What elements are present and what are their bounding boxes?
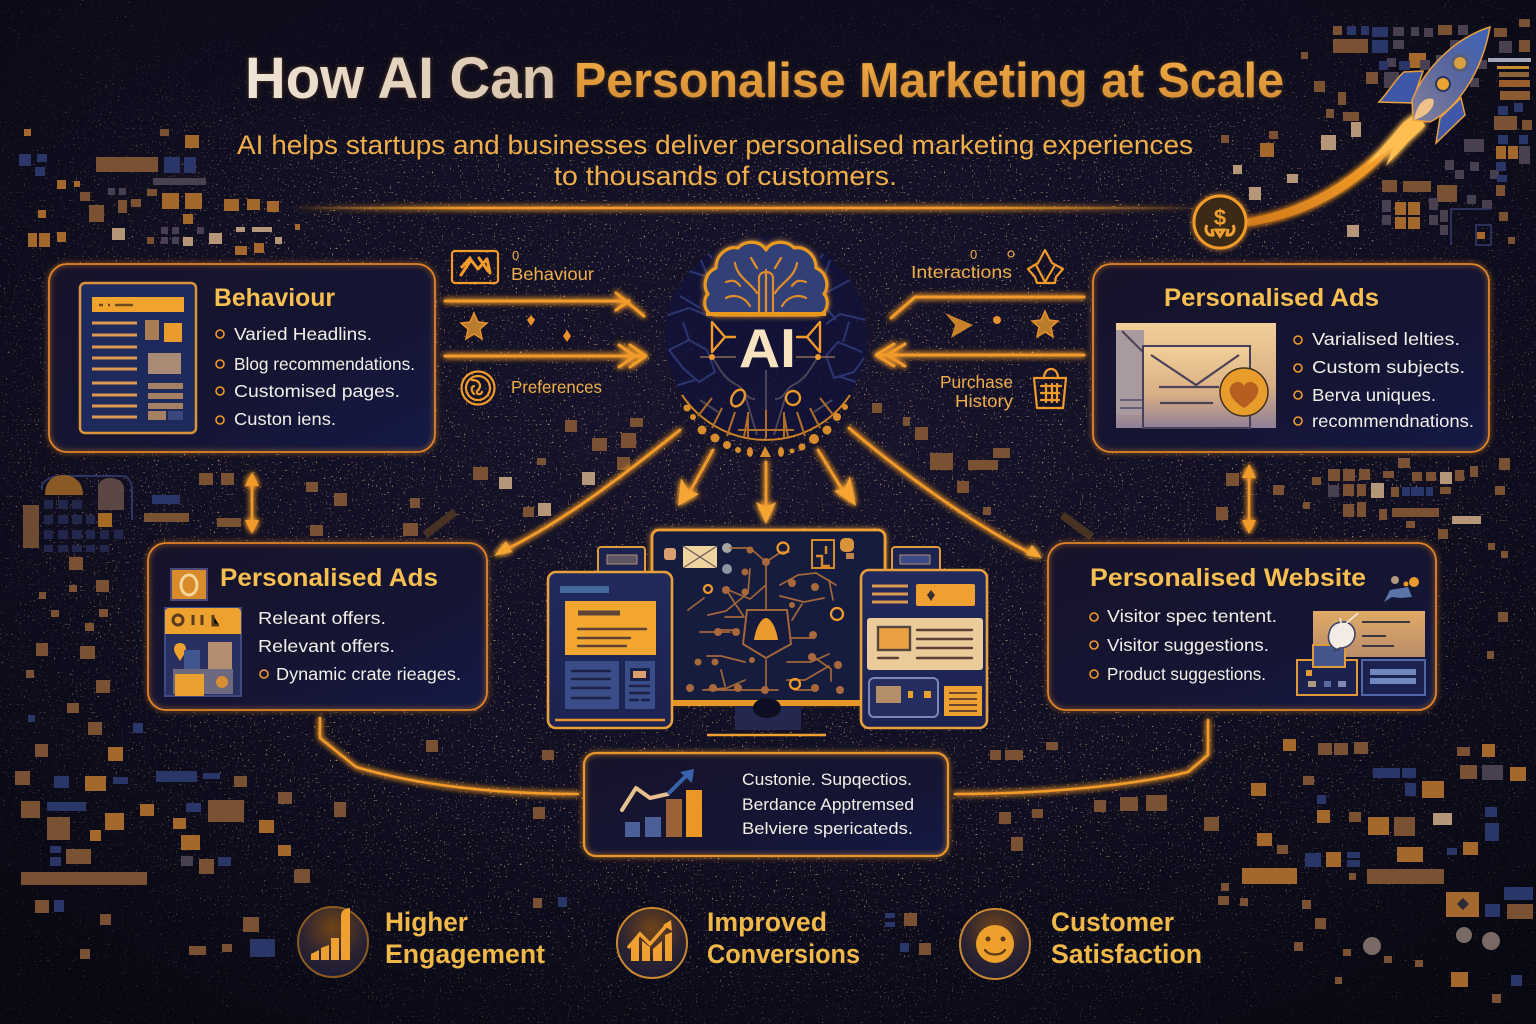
tick ring xyxy=(684,404,848,457)
offer list: Dynamic crate rieages. xyxy=(276,664,461,684)
subtitle xyxy=(237,130,1193,191)
bullet list: Berva uniques. xyxy=(1312,385,1436,405)
stat: higher engagement: Engagement xyxy=(385,939,545,969)
panel: outcome summary xyxy=(584,753,948,856)
curved connectors to outcome box xyxy=(320,718,1208,794)
bullet list: Visitor suggestions. xyxy=(1107,635,1269,655)
bullet list: Visitor spec tentent. xyxy=(1107,606,1277,626)
label: purchase history: History xyxy=(955,391,1013,411)
panel: personalised ads bottom left xyxy=(148,543,487,710)
label: purchase history: Purchase xyxy=(940,372,1013,392)
network globe xyxy=(665,236,867,438)
summary text xyxy=(742,770,914,838)
input labels left: 0 xyxy=(512,248,519,263)
central device illustration xyxy=(548,530,987,735)
stat: higher engagement: Higher xyxy=(385,907,468,937)
subtitle: AI helps startups and businesses deliver personalised marketing experiences xyxy=(237,130,1193,160)
icon: preferences circle xyxy=(462,372,494,404)
icon: chart box xyxy=(452,251,498,283)
circuit network xyxy=(664,538,854,694)
icon: play arrow xyxy=(945,313,973,338)
panel: behaviour xyxy=(49,264,435,452)
AI text: AI xyxy=(739,317,796,379)
icon: growth chart xyxy=(617,908,687,978)
stat: customer satisfaction: Satisfaction xyxy=(1051,939,1202,969)
panel: personalised website xyxy=(1048,543,1436,710)
bullet list: Customised pages. xyxy=(234,381,400,401)
icon: interactions xyxy=(1028,250,1063,283)
bar chart with arrow xyxy=(622,769,702,837)
subtitle: to thousands of customers. xyxy=(554,161,897,191)
icon: visitor xyxy=(1384,576,1419,602)
bullet list: Varialised lelties. xyxy=(1312,329,1460,349)
decorative building outline, left xyxy=(23,475,1092,552)
monitor xyxy=(652,530,885,735)
coin icon xyxy=(1194,196,1246,248)
bullet list xyxy=(216,324,415,429)
offer list xyxy=(258,608,461,684)
icon: ad badge xyxy=(171,569,207,600)
bullet list: Blog recommendations. xyxy=(234,354,415,374)
label: purchase history xyxy=(940,372,1013,411)
heading: Personalised Ads xyxy=(220,564,438,592)
stat: higher engagement xyxy=(298,907,545,977)
heading: Behaviour xyxy=(214,284,335,312)
stat: improved conversions: Conversions xyxy=(707,939,860,969)
rocket with trail and coin xyxy=(1194,27,1531,248)
right tablet xyxy=(861,570,987,728)
left tablet xyxy=(548,572,672,728)
envelope illustration xyxy=(1116,323,1276,428)
bullet list xyxy=(1090,606,1277,684)
offer list: Relevant offers. xyxy=(258,636,395,656)
title xyxy=(245,46,1284,111)
rocket xyxy=(1379,27,1490,143)
divider xyxy=(290,207,1210,209)
icon: smiley xyxy=(960,909,1030,979)
icon: star xyxy=(461,313,487,339)
icon: basket xyxy=(1034,369,1066,408)
bullet list: Varied Headlins. xyxy=(234,324,372,344)
AI brain emblem xyxy=(665,236,867,457)
website illustration xyxy=(1297,611,1425,695)
summary text: Berdance Apptremsed xyxy=(742,795,914,814)
bullet list: Custon iens. xyxy=(234,409,336,429)
tiny code text blocks xyxy=(1488,58,1531,100)
icon: star xyxy=(1032,311,1058,337)
bullet list: Product suggestions. xyxy=(1107,664,1266,684)
heading: Personalised Ads xyxy=(1164,284,1379,312)
label: interactions: Interactions xyxy=(911,262,1012,282)
title: Personalise Marketing at Scale xyxy=(574,54,1284,108)
arrows into AI, left xyxy=(445,293,646,367)
stat: improved conversions xyxy=(617,907,860,978)
stat: customer satisfaction xyxy=(960,907,1202,979)
bullet list: Custom subjects. xyxy=(1312,357,1465,377)
summary text: Belviere spericateds. xyxy=(742,819,913,838)
heading: Personalised Website xyxy=(1090,564,1366,592)
input labels right: 0 xyxy=(970,247,977,262)
decorative diamonds xyxy=(527,315,1001,342)
coin icon: $ xyxy=(1214,205,1226,230)
bullet list xyxy=(1294,329,1474,431)
label: preferences: Preferences xyxy=(511,377,602,397)
input labels right xyxy=(911,247,1066,411)
double arrows between panels xyxy=(245,464,1256,534)
back tabs xyxy=(598,547,940,573)
rocket trail xyxy=(1246,112,1425,226)
label: behaviour: Behaviour xyxy=(511,264,594,284)
mini ad illustration xyxy=(165,608,241,696)
output arrows from AI xyxy=(494,428,1042,558)
panel: personalised ads top right xyxy=(1093,264,1489,452)
brain xyxy=(705,242,827,315)
bullet list: recommendnations. xyxy=(1312,411,1474,431)
title: How AI Can xyxy=(245,46,556,111)
arrows into AI, right xyxy=(876,297,1084,366)
AI node brackets xyxy=(712,322,820,352)
tablet illustration xyxy=(80,283,196,433)
stat: improved conversions: Improved xyxy=(707,907,827,937)
summary text: Custonie. Supqectios. xyxy=(742,770,912,789)
offer list: Releant offers. xyxy=(258,608,386,628)
input labels left xyxy=(452,248,602,404)
stat: customer satisfaction: Customer xyxy=(1051,907,1174,937)
icon: rising bars xyxy=(298,907,368,977)
